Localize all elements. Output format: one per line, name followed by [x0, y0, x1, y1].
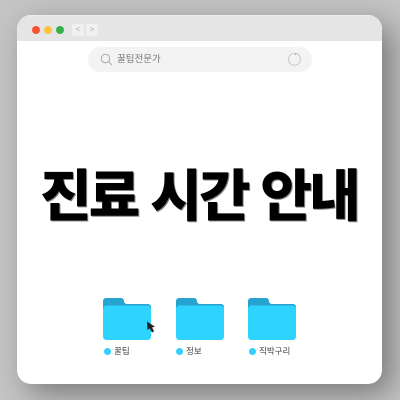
icon: magnifier	[100, 54, 112, 66]
label: 꿀팁: 꿀팁	[114, 346, 130, 356]
window button: green	[56, 26, 64, 34]
search bar	[88, 47, 312, 72]
dot: 꿀팁	[104, 348, 111, 354]
label: 정보: 정보	[186, 346, 202, 356]
title bar	[17, 15, 382, 41]
back button: <	[76, 25, 80, 34]
dot: 정보	[176, 348, 183, 354]
forward button	[86, 24, 98, 36]
back button	[72, 24, 84, 36]
search text: 꿀팁전문가	[117, 54, 161, 65]
forward button: >	[90, 25, 94, 34]
dot: 직박구리	[249, 348, 256, 354]
folder: 직박구리	[248, 298, 296, 340]
window button: yellow	[44, 26, 52, 34]
label: 직박구리: 직박구리	[259, 346, 290, 356]
folder: 정보	[176, 298, 224, 340]
window button: red	[32, 26, 40, 34]
folder: 꿀팁	[103, 298, 151, 340]
title: 진료 시간 안내	[40, 165, 358, 228]
icon: cursor	[147, 322, 155, 332]
icon: reload	[288, 52, 301, 66]
